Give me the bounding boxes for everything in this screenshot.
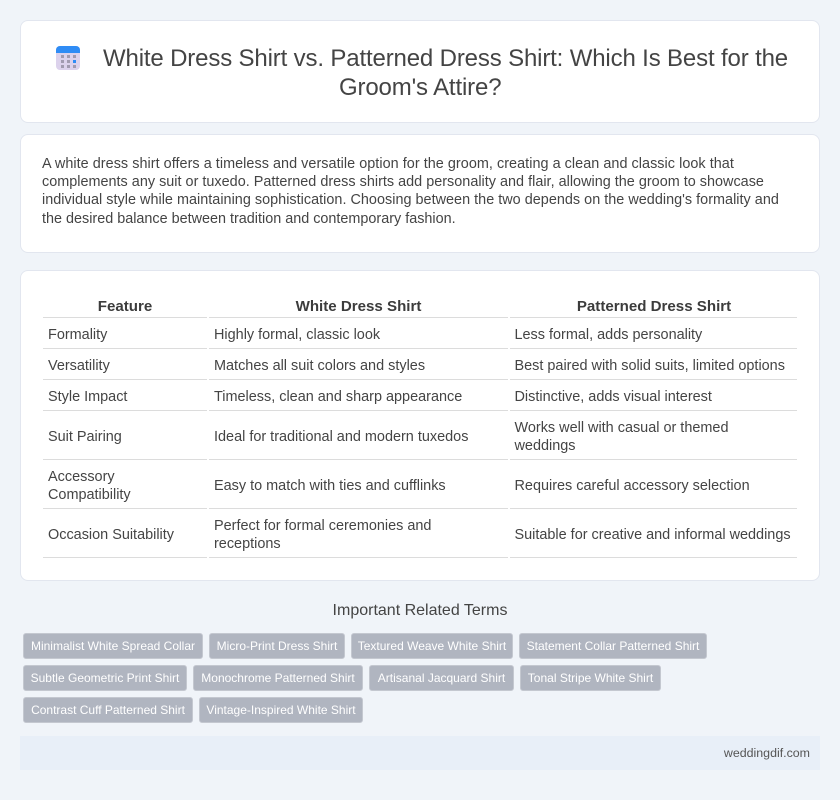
table: weddings	[514, 438, 576, 454]
table: Compatibility	[48, 487, 131, 503]
tag	[519, 633, 707, 659]
table: Less formal, adds personality	[514, 327, 702, 343]
table: receptions	[214, 536, 281, 552]
tag: Tonal Stripe White Shirt	[528, 671, 653, 685]
tag	[369, 665, 514, 691]
tag: Monochrome Patterned Shirt	[201, 671, 355, 685]
intro paragraph: the desired balance between tradition and contemporary fashion.	[42, 211, 456, 227]
tag	[193, 665, 363, 691]
header panel	[20, 20, 820, 123]
table: Matches all suit colors and styles	[214, 358, 425, 374]
table: White Dress Shirt	[296, 298, 421, 315]
title: White Dress Shirt vs. Patterned Dress Shirt: Which Is Best for the	[103, 45, 788, 72]
table: Formality	[48, 327, 107, 343]
footer bar	[20, 736, 820, 770]
table: Style Impact	[48, 389, 127, 405]
tag: Contrast Cuff Patterned Shirt	[31, 703, 185, 717]
tag	[520, 665, 661, 691]
table: Works well with casual or themed	[514, 420, 728, 436]
intro text panel	[20, 134, 820, 253]
icon: calendar	[56, 46, 80, 70]
table: Feature	[98, 298, 152, 315]
tag	[209, 633, 345, 659]
table: Occasion Suitability	[48, 527, 174, 543]
table: Requires careful accessory selection	[514, 478, 750, 494]
tag: Minimalist White Spread Collar	[31, 639, 195, 653]
table	[43, 298, 797, 558]
table: Highly formal, classic look	[214, 327, 380, 343]
related terms tags	[23, 633, 707, 723]
tag	[23, 697, 193, 723]
intro paragraph	[42, 156, 779, 227]
title	[103, 45, 788, 101]
table: Suit Pairing	[48, 429, 122, 445]
intro paragraph: A white dress shirt offers a timeless and versatile option for the groom, creating a clean and classic look that	[42, 156, 734, 172]
tag	[23, 665, 187, 691]
tag: Statement Collar Patterned Shirt	[527, 639, 699, 653]
related terms heading: Important Related Terms	[333, 602, 507, 619]
table: Perfect for formal ceremonies and	[214, 518, 431, 534]
table: Best paired with solid suits, limited options	[514, 358, 785, 374]
table: Ideal for traditional and modern tuxedos	[214, 429, 468, 445]
footer source text: weddingdif.com	[724, 746, 810, 760]
tag	[351, 633, 513, 659]
tag	[199, 697, 363, 723]
tag: Artisanal Jacquard Shirt	[378, 671, 505, 685]
table: Patterned Dress Shirt	[577, 298, 731, 315]
intro paragraph: individual style while maintaining sophistication. Choosing between the two depends on the wedding's formality and	[42, 192, 779, 208]
table: Accessory	[48, 469, 115, 485]
tag: Textured Weave White Shirt	[358, 639, 506, 653]
tag: Micro-Print Dress Shirt	[217, 639, 337, 653]
table: Versatility	[48, 358, 110, 374]
tag: Subtle Geometric Print Shirt	[31, 671, 179, 685]
comparison table panel	[20, 270, 820, 581]
tag	[23, 633, 203, 659]
table: Timeless, clean and sharp appearance	[214, 389, 462, 405]
title: Groom's Attire?	[339, 74, 501, 101]
table: Suitable for creative and informal weddings	[514, 527, 791, 543]
intro paragraph: complements any suit or tuxedo. Patterned dress shirts add personality and flair, allowing the groom to showcase	[42, 174, 764, 190]
table: Distinctive, adds visual interest	[514, 389, 712, 405]
tag: Vintage-Inspired White Shirt	[206, 703, 356, 717]
table: Easy to match with ties and cufflinks	[214, 478, 446, 494]
